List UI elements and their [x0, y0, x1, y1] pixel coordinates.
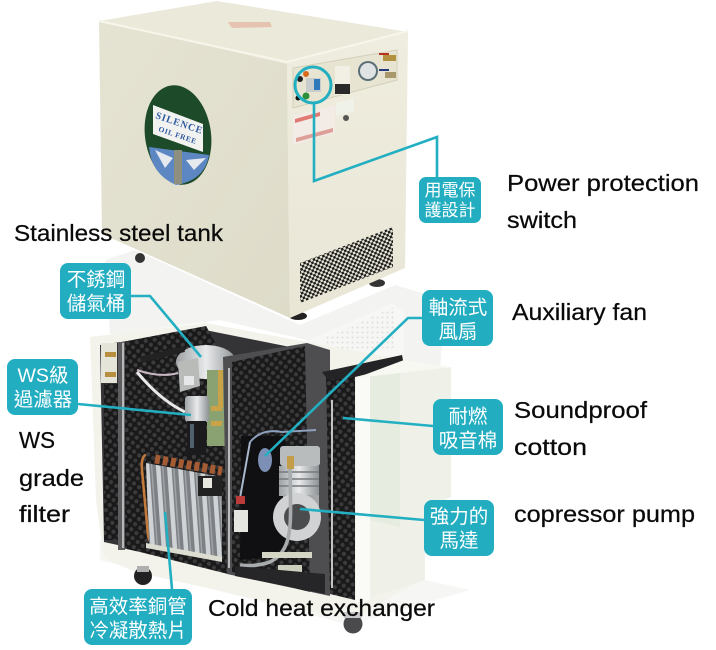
silence oil free logo: [138, 81, 218, 189]
WS grade filter: [137, 372, 222, 455]
callout: auxiliary fan (Chinese): 軸流式: [429, 297, 487, 319]
highlight ring: power switch: [295, 67, 331, 103]
callout: compressor pump (Chinese): [424, 500, 494, 556]
callout: WS filter (Chinese): 過濾器: [14, 389, 72, 411]
label: auxiliary fan: Auxiliary fan: [512, 299, 647, 325]
label: WS grade filter: grade: [19, 465, 84, 491]
callout: power protection (Chinese): [419, 177, 481, 223]
left face: [99, 21, 290, 318]
axial fan: [234, 430, 316, 560]
left foam panel: [122, 326, 228, 574]
label: power protection switch: Power protection: [507, 170, 699, 196]
label: soundproof cotton: cotton: [514, 434, 587, 460]
callout: soundproof cotton (Chinese): [433, 399, 503, 455]
label: power protection switch: [507, 170, 699, 233]
callout: soundproof cotton (Chinese): 吸音棉: [439, 430, 497, 452]
air tank: [137, 345, 236, 446]
callout: heat exchanger (Chinese): 冷凝散熱片: [89, 620, 187, 642]
callout: heat exchanger (Chinese): [84, 589, 192, 645]
callout: heat exchanger (Chinese): 高效率銅管: [89, 596, 187, 618]
right foam panel: [322, 355, 404, 600]
label: WS grade filter: filter: [19, 501, 70, 527]
callout: power protection (Chinese): 用電保: [424, 181, 476, 200]
label: WS grade filter: [19, 427, 84, 527]
callout: soundproof cotton (Chinese): 耐燃: [448, 406, 488, 428]
label: cold heat exchanger: Cold heat exchanger: [208, 595, 435, 621]
callout: compressor pump (Chinese): 強力的: [430, 506, 488, 528]
callout: auxiliary fan (Chinese): 風扇: [438, 321, 478, 343]
callout: WS filter (Chinese): WS級: [18, 365, 68, 387]
label: stainless steel tank: Stainless steel tank: [14, 220, 223, 246]
label: power protection switch: switch: [507, 207, 577, 233]
callout: compressor pump (Chinese): 馬達: [439, 530, 479, 552]
warning stickers: [293, 98, 354, 145]
lower unit: open compressor cabinet: [90, 303, 451, 634]
ventilation grate: [300, 227, 393, 303]
cabinet white frame: [90, 323, 425, 618]
divider foam panel: [223, 343, 330, 596]
open side door: [356, 360, 451, 602]
cold heat exchanger: [142, 455, 222, 562]
callout: power protection (Chinese): 護設計: [424, 201, 476, 220]
floor reflection: [100, 250, 470, 625]
callout: stainless steel tank (Chinese): 不銹鋼: [67, 269, 125, 291]
callout: WS filter (Chinese): [7, 359, 78, 415]
silence oil free logo: SILENCE: [154, 110, 204, 137]
callout: auxiliary fan (Chinese): [422, 290, 493, 346]
label: compressor pump: copressor pump: [514, 501, 695, 527]
compressor pump: [235, 446, 325, 594]
callout: stainless steel tank (Chinese): 儲氣桶: [67, 293, 125, 315]
left rear fittings: [101, 343, 118, 540]
label: soundproof cotton: Soundproof: [514, 397, 647, 423]
right face: [287, 32, 408, 318]
label: WS grade filter: WS: [19, 427, 55, 453]
upper unit: closed compressor housing: [99, 1, 408, 320]
back grille panel: [305, 303, 404, 372]
caster wheels: [134, 566, 362, 634]
silence oil free logo: OIL FREE: [157, 124, 198, 146]
top face: [99, 1, 408, 64]
top logo mark: [228, 22, 272, 28]
callout: stainless steel tank (Chinese): [60, 263, 131, 319]
label: soundproof cotton: [514, 397, 647, 460]
leader lines: [78, 103, 437, 589]
control panel: [293, 50, 397, 108]
